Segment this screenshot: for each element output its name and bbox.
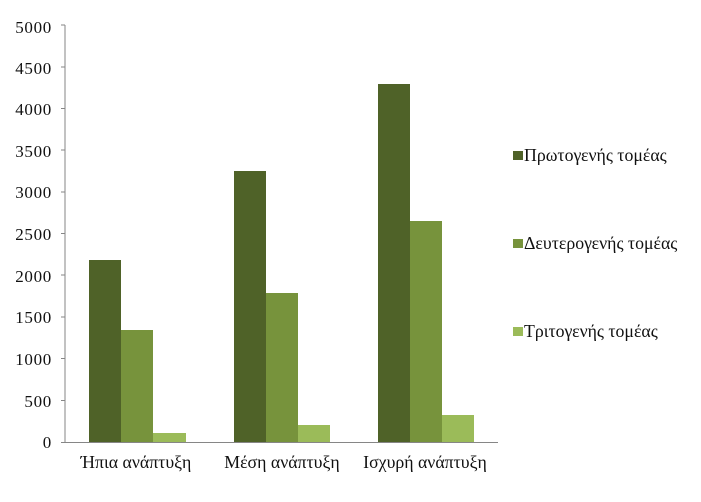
y axis labels: 2000 [15, 267, 52, 286]
y axis labels: 5000 [15, 18, 52, 37]
y axis labels: 0 [43, 433, 52, 452]
y axis labels [15, 18, 52, 452]
x axis labels: Μέση ανάπτυξη [224, 452, 340, 472]
y axis labels: 2500 [15, 225, 52, 244]
y axis labels: 1000 [15, 350, 52, 369]
y axis labels: 1500 [15, 308, 52, 327]
legend item: Πρωτογενής τομέας: Πρωτογενής τομέας [524, 145, 667, 165]
bar group: Ήπια ανάπτυξη [89, 260, 186, 442]
bar group: Ισχυρή ανάπτυξη [378, 84, 474, 442]
y axis labels: 4500 [15, 59, 52, 78]
y axis labels: 3500 [15, 142, 52, 161]
x axis labels: Ισχυρή ανάπτυξη [363, 452, 487, 472]
y axis labels: 4000 [15, 100, 52, 119]
legend [513, 145, 677, 341]
legend item: Δευτερογενής τομέας: Δευτερογενής τομέας [524, 233, 677, 253]
legend item: Τριτογενής τομέας: Τριτογενής τομέας [524, 321, 658, 341]
y axis labels: 3000 [15, 183, 52, 202]
bar group: Μέση ανάπτυξη [234, 171, 330, 442]
y axis labels: 500 [24, 392, 52, 411]
x axis labels [80, 452, 487, 472]
x axis labels: Ήπια ανάπτυξη [80, 452, 191, 472]
